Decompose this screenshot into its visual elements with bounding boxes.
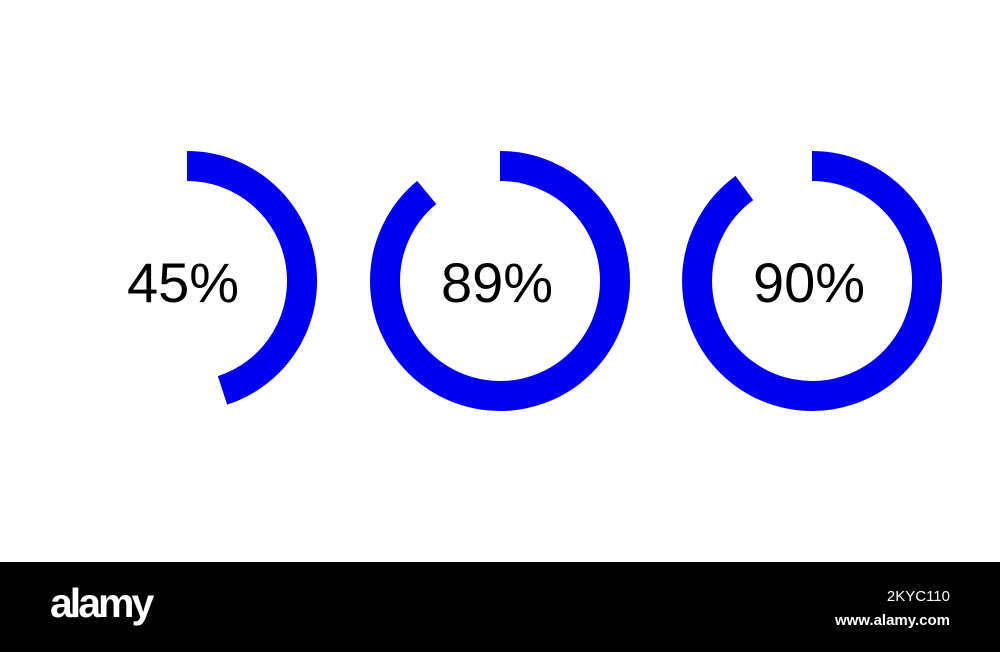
ring: 89%: 89% [441,251,553,314]
ring: 45% [127,166,302,390]
image code: www.alamy.com [835,612,950,629]
ring: 90%: 90% [753,251,865,314]
ring: 90% [697,166,927,396]
logo text: alamy [50,580,151,626]
ring: 45%: 45% [127,251,239,314]
image code [835,588,950,629]
footer bar [0,562,1000,652]
ring: 89% [385,166,615,396]
image code: 2KYC110 [887,588,950,605]
